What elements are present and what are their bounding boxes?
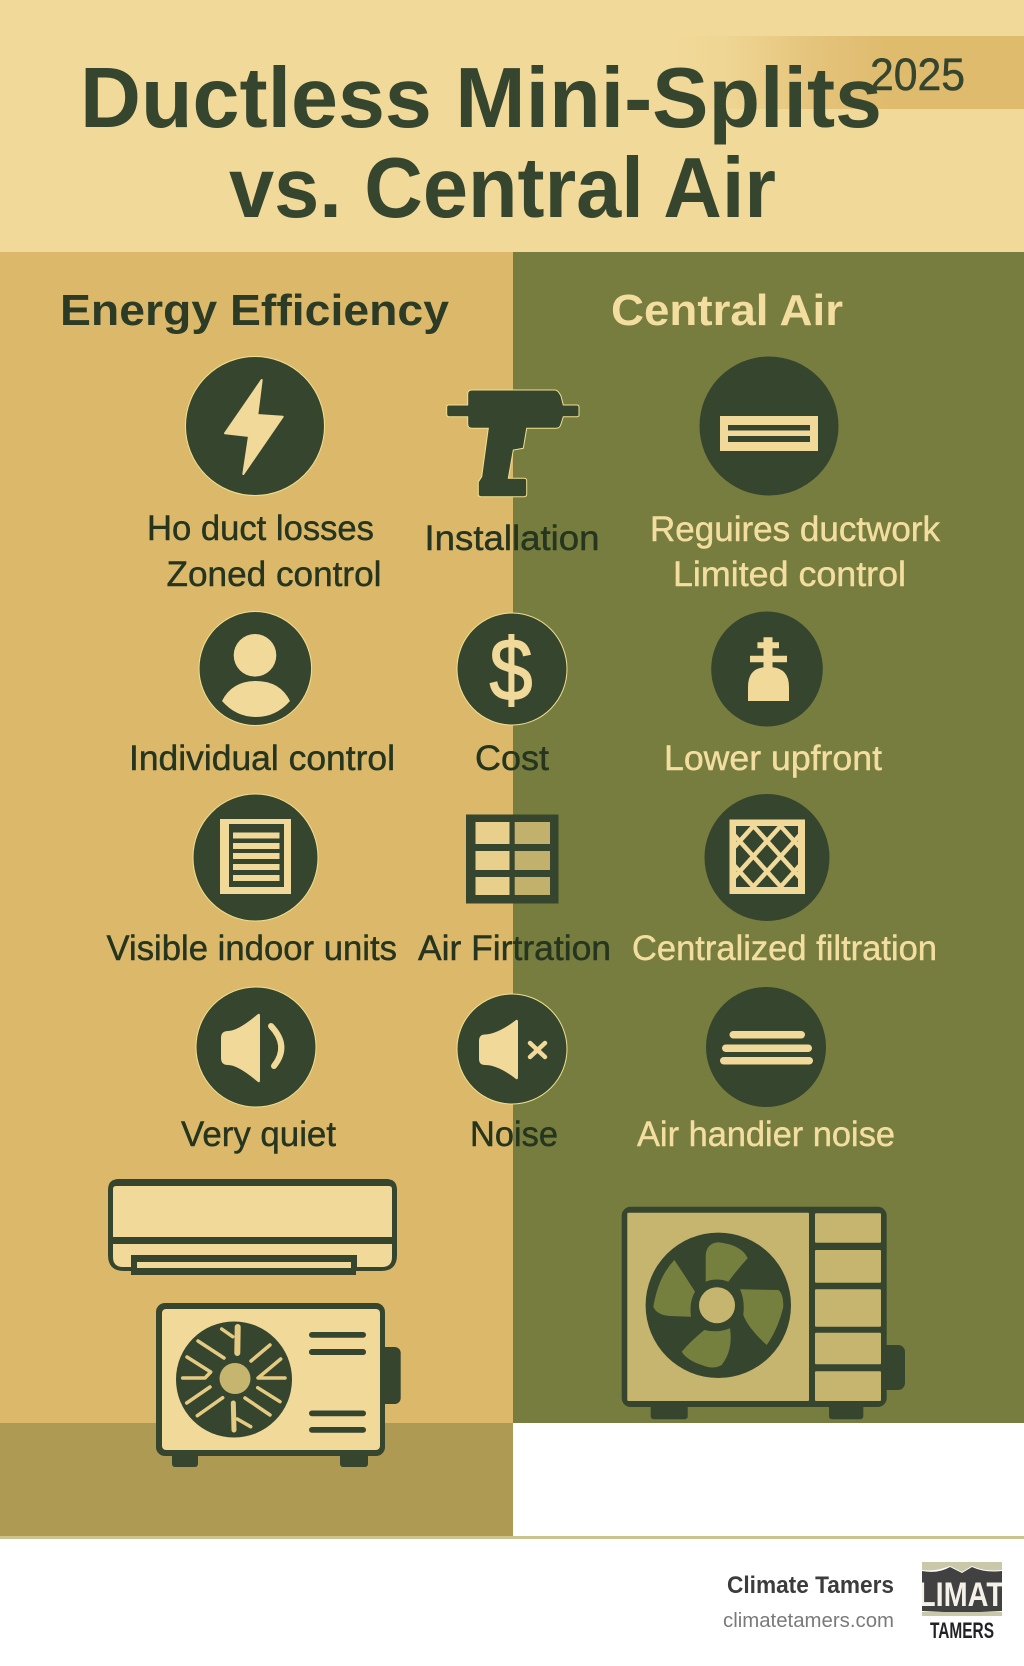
icon: speaker quiet	[196, 987, 316, 1107]
panel: mini-split column	[0, 252, 513, 1536]
label: no duct losses: Ho duct losses	[147, 509, 374, 548]
icon: dollar: $	[489, 620, 533, 719]
label: installation: Installation	[424, 519, 600, 558]
header panel	[0, 0, 1024, 252]
label: centralized filtration: Centralized filtration	[632, 929, 937, 968]
icon: lattice filter	[698, 794, 836, 921]
panel: central air column	[513, 252, 1024, 1423]
illustration: outdoor mini-split unit	[156, 1303, 401, 1467]
illustration: central air condenser	[622, 1207, 905, 1419]
heading: central air: Central Air	[611, 286, 843, 335]
icon: dollar	[457, 613, 567, 725]
label: individual control: Individual control	[129, 739, 395, 778]
footer website: climatetamers.com	[723, 1610, 894, 1632]
label: requires ductwork: Reguires ductwork	[650, 510, 941, 549]
icon: air handler bars	[706, 987, 826, 1107]
icon: thermostat	[711, 612, 823, 726]
heading: energy efficiency: Energy Efficiency	[60, 286, 450, 335]
icon: person	[199, 612, 312, 726]
title	[80, 51, 882, 236]
label: limited control: Limited control	[673, 555, 906, 594]
title: Ductless Mini-Splits	[80, 51, 882, 146]
label: zoned control: Zoned control	[166, 555, 382, 594]
icon: air vent	[700, 356, 838, 496]
icon: indoor unit grille	[193, 794, 318, 921]
label: very quiet: Very quiet	[181, 1115, 336, 1154]
logo: climate tamers: LIMAT	[918, 1576, 1004, 1614]
logo: climate tamers: TAMERS	[930, 1618, 994, 1643]
label: cost: Cost	[475, 739, 549, 778]
icon: air filter grid	[466, 814, 558, 904]
label: air filtration: Air Firtration	[418, 929, 611, 968]
label: visible indoor units: Visible indoor units	[106, 929, 397, 968]
icon: drill	[447, 390, 579, 497]
year label: 2025	[870, 49, 965, 100]
label: noise: Noise	[470, 1115, 558, 1154]
footer divider	[0, 1536, 1024, 1539]
label: lower upfront: Lower upfront	[664, 739, 882, 778]
title: vs. Central Air	[229, 141, 776, 236]
logo: climate tamers	[922, 1562, 1002, 1638]
footer brand name: Climate Tamers	[727, 1572, 894, 1599]
illustration: indoor mini-split unit	[108, 1179, 397, 1275]
label: air handler noise: Air handier noise	[637, 1115, 895, 1154]
icon: lightning bolt	[186, 356, 324, 496]
icon: speaker mute	[457, 994, 567, 1104]
